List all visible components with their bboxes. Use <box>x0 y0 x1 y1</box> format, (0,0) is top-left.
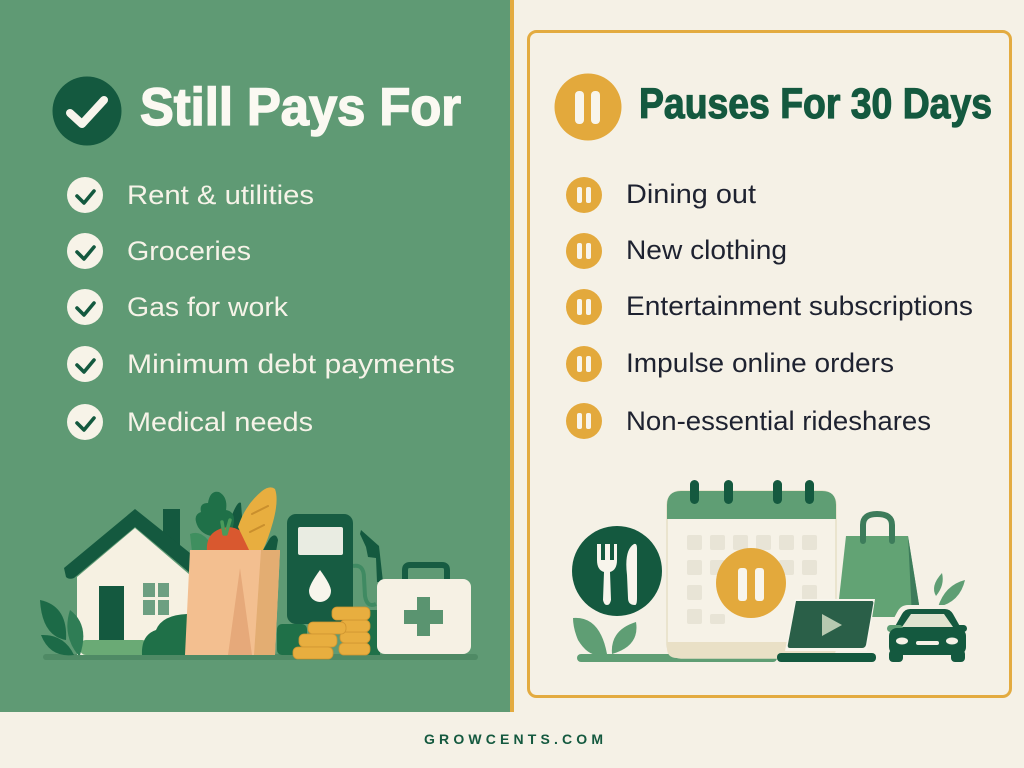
icon: large pause <box>554 74 622 140</box>
icon: house <box>64 509 190 655</box>
item: minimum debt payments: Minimum debt payments <box>127 349 455 379</box>
item: impulse online orders <box>566 346 894 382</box>
panel: pauses for 30 days <box>528 32 1010 696</box>
item: dining out <box>566 177 757 213</box>
item: gas for work <box>67 289 289 325</box>
item: entertainment subscriptions <box>566 289 973 325</box>
item: minimum debt payments <box>67 346 455 382</box>
item: new clothing <box>566 233 787 269</box>
item: entertainment subscriptions: Entertainment subscriptions <box>626 291 973 321</box>
icon: large check <box>52 76 122 146</box>
icon: laptop <box>777 599 876 662</box>
list: paid items <box>67 177 455 440</box>
icon: gas pump <box>277 514 383 655</box>
icon: coin stacks <box>293 607 370 659</box>
item: gas for work: Gas for work <box>127 292 289 322</box>
item: rent and utilities <box>67 177 314 213</box>
item: new clothing: New clothing <box>626 235 787 265</box>
heading: still pays for: Still Pays For <box>140 78 461 137</box>
footer: website: GROWCENTS.COM <box>424 731 603 747</box>
item: dining out: Dining out <box>626 179 757 209</box>
item: groceries <box>67 233 251 269</box>
item: groceries: Groceries <box>127 236 251 266</box>
illustration: essentials <box>40 487 478 660</box>
icon: grocery bag <box>185 487 280 655</box>
list: paused items <box>566 177 973 439</box>
item: non-essential rideshares: Non-essential rideshares <box>626 406 931 436</box>
icon: dining <box>572 526 662 655</box>
item: medical needs <box>67 404 313 440</box>
item: medical needs: Medical needs <box>127 407 313 437</box>
icon: plant <box>40 600 83 655</box>
item: impulse online orders: Impulse online orders <box>626 348 894 378</box>
item: rent and utilities: Rent & utilities <box>127 180 314 210</box>
item: non-essential rideshares <box>566 403 931 439</box>
icon: first aid kit <box>377 565 471 654</box>
icon: car with leaves <box>887 573 967 662</box>
icon: calendar <box>667 480 836 658</box>
icon: shopping bag <box>837 514 921 617</box>
illustration: paused spending <box>572 480 967 662</box>
panel: still pays for <box>0 0 514 712</box>
